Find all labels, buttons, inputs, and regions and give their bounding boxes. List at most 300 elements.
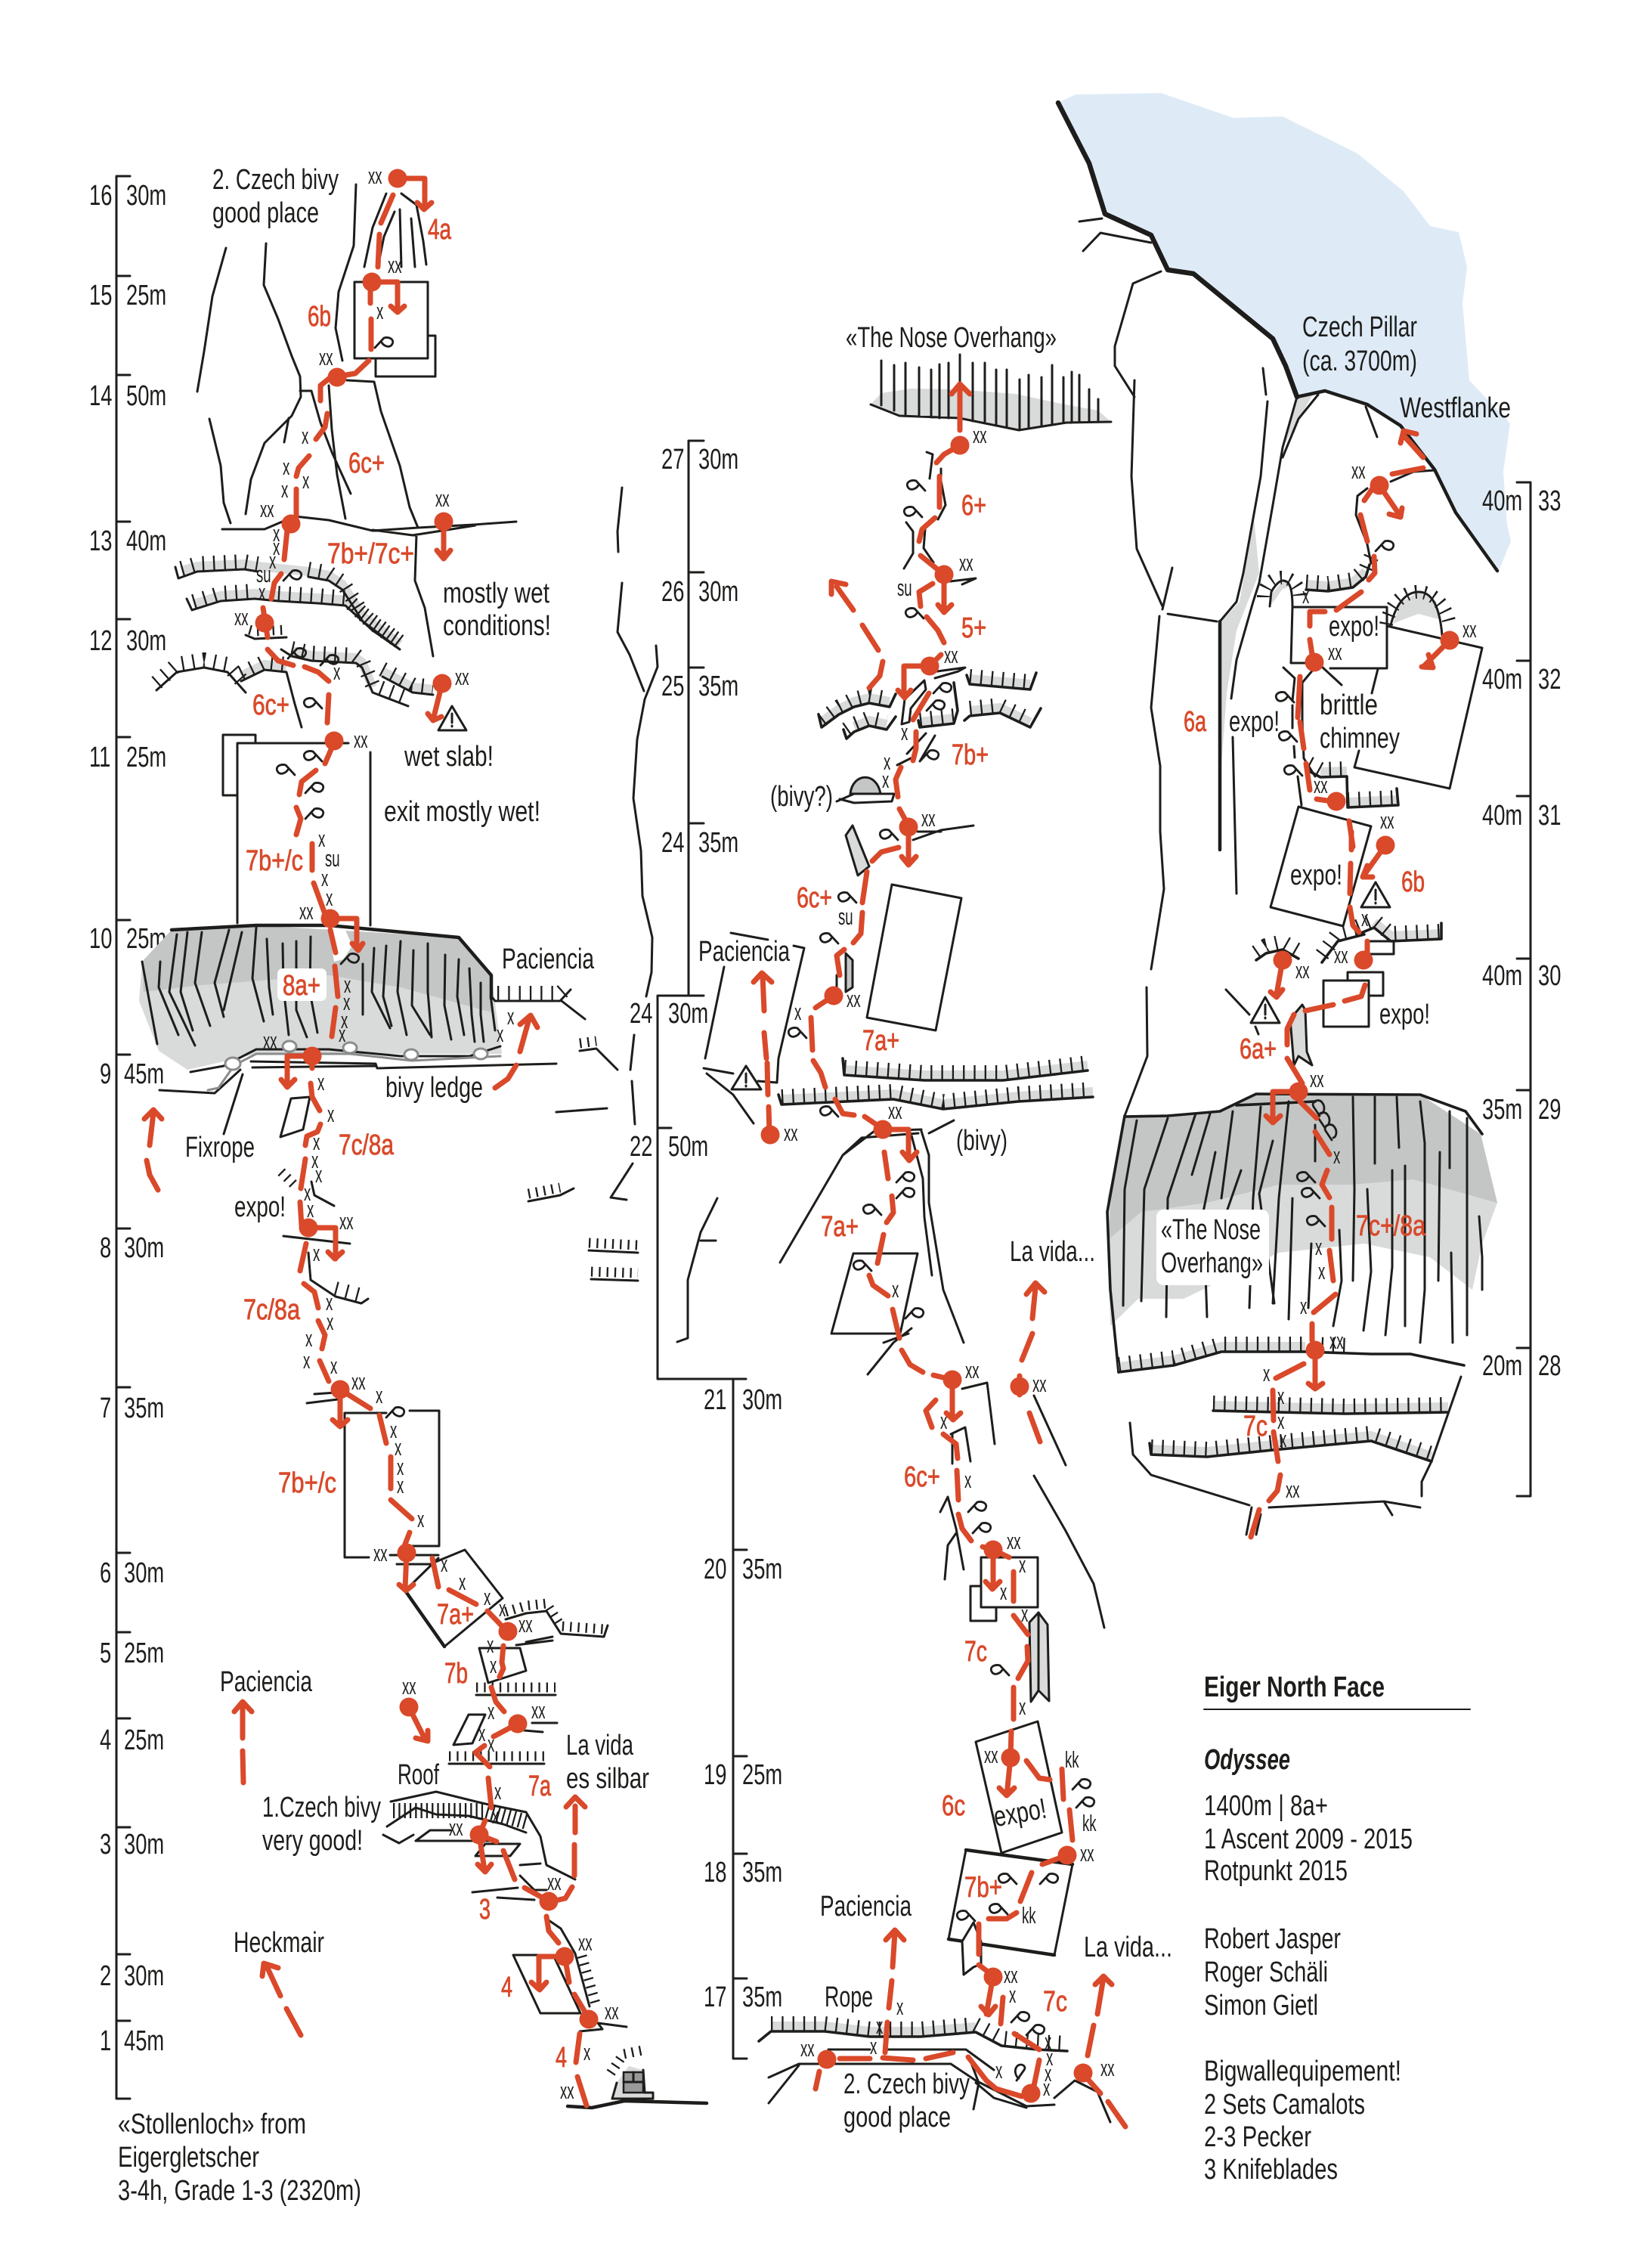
Czech Pillar ridge and outline [1058, 103, 1497, 1116]
bolt marks: xx [402, 1674, 416, 1699]
bolt marks: x [487, 1632, 494, 1658]
bolt marks middle: x [901, 720, 908, 745]
bolt marks: x [417, 1507, 424, 1532]
bolt marks: x [269, 548, 276, 574]
grades left: 6c+ [252, 689, 289, 721]
overhang at pitch 10 shaded rock [139, 925, 502, 1070]
approach note [118, 2108, 361, 2207]
pitch scale right: 31 [1538, 800, 1561, 832]
notes middle: La vida... [1084, 1932, 1172, 1963]
equipment list: 2 Sets Camalots [1204, 2089, 1365, 2121]
notes left: wet slab! [404, 741, 494, 773]
equipment list: Bigwallequipement! [1204, 2056, 1401, 2087]
notes middle: (bivy?) [770, 781, 833, 813]
first ascensionists: Simon Gietl [1204, 1990, 1318, 2022]
bolt marks: x [390, 1418, 397, 1443]
bolt marks middle: x [1009, 1982, 1016, 2008]
bolt marks middle: kk [1065, 1747, 1079, 1773]
bolt marks: x [305, 1326, 312, 1352]
pitch scale right: 28 [1538, 1350, 1561, 1382]
bolt marks middle: su [897, 575, 912, 601]
bolt marks: x [273, 521, 280, 547]
pitch scale left: 40m [126, 525, 166, 557]
grades middle: 5+ [961, 612, 986, 644]
bolt marks: xx [455, 665, 469, 690]
pitch scale middle upper [630, 441, 746, 1379]
pitch scale right: 40m [1482, 800, 1522, 832]
bolt marks right: xx [1295, 958, 1310, 984]
grades middle: 6c [942, 1790, 965, 1822]
hatching bands middle [759, 673, 1093, 2051]
pitch scale left: 30m [124, 1557, 164, 1589]
bolt marks middle: x [794, 999, 801, 1025]
bolt marks middle: xx [784, 1120, 798, 1146]
pitch scale left: 6 [100, 1557, 111, 1589]
grades middle: 6c+ [904, 1461, 940, 1493]
notes left: exit mostly wet! [384, 796, 540, 828]
grades right: 7c+/8a [1356, 1210, 1426, 1242]
notes middle: «The Nose Overhang» [846, 322, 1057, 354]
bolt marks: x [326, 885, 333, 911]
notes left: conditions! [443, 610, 551, 642]
red route right [1251, 431, 1450, 1537]
bivy boulder [850, 777, 881, 794]
pitch scale left: 30m [124, 1829, 164, 1861]
pitch scale right: 30 [1538, 960, 1561, 992]
approach note: Eigergletscher [118, 2142, 259, 2174]
pitch scale right: 32 [1538, 664, 1561, 696]
box sides with 7b+ pitch [949, 1850, 1072, 1955]
notes right [1161, 311, 1511, 1279]
pitch scale middle lower: 30m [742, 1384, 782, 1416]
notes middle: Rope [825, 1981, 873, 2013]
grades left: 7c/8a [243, 1294, 301, 1326]
pitons middle [788, 480, 1094, 2081]
bolt marks middle: kk [1082, 1811, 1097, 1836]
pitch scale right [1482, 482, 1561, 1496]
arrow: to Paciencia middle upper [754, 973, 772, 1135]
bolt marks: x [488, 1699, 494, 1724]
bolt marks: x [303, 1348, 310, 1374]
title: Eiger North Face [1204, 1672, 1385, 1703]
pitch scale left: 35m [124, 1393, 164, 1424]
grades middle: 7b+ [952, 739, 989, 771]
fixrope [208, 1054, 500, 1090]
overhang hatching bands left [156, 562, 642, 2073]
bolt marks middle: xx [1004, 1963, 1018, 1988]
grades middle: 7c [1043, 1986, 1067, 2018]
arrow: to Paciencia upper [495, 1015, 537, 1088]
arrow: to La vida lower middle [1083, 1976, 1125, 2127]
pitch scale left: 9 [100, 1058, 111, 1090]
pitch scale left: 3 [100, 1829, 111, 1861]
bolt marks right: x [1263, 1361, 1270, 1387]
bolt marks middle: x [896, 1994, 903, 2020]
notes middle [698, 322, 1172, 2133]
grey inside arches [1271, 581, 1441, 624]
pitch scale left: 12 [89, 625, 112, 657]
pitch scale right: 35m [1482, 1094, 1522, 1126]
notes left [185, 164, 649, 1959]
notes left: Paciencia [502, 943, 595, 975]
pitch scale left: 16 [89, 180, 112, 212]
grades right [1184, 706, 1426, 1442]
bolt marks middle: x [870, 2034, 877, 2059]
grades middle: 7a+ [821, 1211, 859, 1243]
equipment list: 2-3 Pecker [1204, 2121, 1311, 2153]
bolt marks: x [492, 1803, 499, 1829]
route data: Rotpunkt 2015 [1204, 1855, 1348, 1887]
bolt marks right: xx [1329, 1328, 1344, 1354]
pitch scale left: 15 [89, 280, 112, 311]
bolt marks right: xx [1310, 1067, 1324, 1092]
pitch scale left: 2 [100, 1960, 111, 1992]
bolt marks right: x [1280, 1427, 1286, 1452]
approach note: «Stollenloch» from [118, 2108, 306, 2140]
bolt marks: xx [260, 497, 274, 522]
bolt marks middle: x [1019, 1552, 1026, 1578]
notes middle: Paciencia [820, 1891, 912, 1923]
bolt marks middle: xx [965, 1358, 980, 1383]
notes right: (ca. 3700m) [1302, 345, 1417, 377]
bolt marks middle: xx [973, 423, 987, 448]
rock features middle [677, 452, 1110, 2122]
bolt marks: x [490, 1653, 497, 1678]
bolt marks middle: x [1021, 1601, 1028, 1627]
bolt marks: x [330, 1353, 337, 1379]
bolt marks middle: xx [921, 806, 936, 832]
grades left: 7b+/c [246, 845, 303, 877]
grades middle [797, 490, 1067, 2018]
bolt marks: x [307, 1197, 314, 1222]
pitch scale left: 45m [124, 1058, 164, 1090]
grades left [243, 214, 567, 2074]
grades left: 3 [479, 1894, 491, 1926]
panel: middle topo, pitches 17-27 [618, 322, 1172, 2133]
grades left: 7b [444, 1658, 468, 1690]
bolt marks: x [339, 1021, 345, 1047]
snowfield: west flank [1058, 93, 1511, 571]
grades middle: 6c+ [797, 882, 832, 914]
grades left: 6b [308, 301, 331, 333]
pitch scale left: 13 [89, 525, 112, 557]
bolt marks middle: x [1046, 2045, 1053, 2071]
grades left: 8a+ [283, 970, 320, 1002]
route data [1204, 1790, 1413, 1887]
bolt marks: x [327, 1101, 334, 1127]
bolt marks: x [376, 1383, 382, 1408]
pitch scale middle upper: 30m [698, 576, 738, 608]
protection icons: pitons [277, 337, 404, 1418]
long crack between columns [618, 488, 658, 996]
notes middle: La vida... [1010, 1236, 1095, 1268]
pitch scale left: 30m [126, 180, 166, 212]
pitch scale middle lower: 25m [742, 1759, 782, 1791]
bolt marks: x [484, 1585, 491, 1610]
grades right: 6b [1401, 866, 1425, 898]
pitch scale right: 20m [1482, 1350, 1522, 1382]
bolt marks middle: xx [944, 643, 958, 668]
pitch scale right: 29 [1538, 1094, 1561, 1126]
pitch scale left: 25m [126, 280, 166, 311]
notes right: Westflanke [1400, 392, 1511, 424]
pitch scale middle upper: 30m [698, 444, 738, 476]
bolt marks: xx [560, 2078, 574, 2104]
pitch scale left: 25m [126, 923, 166, 955]
grades left: 7a [528, 1771, 552, 1802]
bolt marks middle: xx [888, 1098, 902, 1124]
notes middle: 2. Czech bivy [843, 2068, 970, 2100]
pitch scale left: 14 [89, 380, 112, 412]
pitch scale middle upper: 22 [630, 1131, 652, 1163]
bolt marks: su [256, 562, 271, 587]
notes right: brittle [1320, 689, 1378, 721]
notes left: Paciencia [220, 1666, 313, 1698]
bolt marks: x [397, 1455, 404, 1480]
bolt marks: xx [547, 1870, 562, 1895]
grades left: 7c/8a [339, 1129, 395, 1161]
notes left: bivy ledge [385, 1072, 483, 1104]
notes middle: good place [843, 2102, 951, 2133]
pitch scale middle upper: 50m [668, 1131, 708, 1163]
pitch scale middle lower: 35m [742, 1981, 782, 2013]
grades left: 7b+/7c+ [327, 538, 414, 570]
Nose overhang rock [1107, 1094, 1497, 1372]
arrow: to Paciencia lower [234, 1702, 252, 1783]
bolt marks middle: xx [1032, 1371, 1047, 1397]
bolt marks right: xx [1334, 943, 1348, 968]
grades middle: 7a+ [862, 1025, 899, 1057]
bolt marks: x [478, 1721, 485, 1746]
hatching bands right [1119, 556, 1464, 1461]
grades left: 7a+ [437, 1599, 474, 1631]
bolt marks middle: x [876, 2013, 883, 2039]
bolt marks middle: x [1019, 1694, 1026, 1720]
bolt marks middle: xx [984, 1743, 998, 1768]
bolt marks middle: x [964, 1467, 971, 1493]
bolt marks right: xx [1286, 1477, 1300, 1503]
bolt marks: xx [373, 1541, 388, 1566]
bolt marks right: xx [1314, 773, 1328, 798]
flake block pitch 30 [1290, 1005, 1312, 1065]
pitch scale left: 10 [89, 923, 112, 955]
bolt marks middle: xx [800, 2036, 815, 2062]
pitch scale middle upper: 30m [668, 998, 708, 1030]
equipment list [1204, 2056, 1401, 2186]
rock features: cracks, ledges, boxes [159, 184, 635, 2031]
bolt marks right: x [1333, 1143, 1340, 1169]
bolt marks: x [313, 1129, 320, 1155]
bolt marks: x [302, 468, 309, 494]
bolt marks: xx [354, 727, 368, 753]
bolt marks: xx [263, 1028, 277, 1054]
bolt marks: x [333, 659, 340, 685]
bolt marks: x [281, 477, 288, 503]
flake blocks [837, 826, 1049, 1975]
pitch scale left [89, 176, 166, 2099]
notes right: expo! [1379, 999, 1430, 1030]
pitch scale right: 40m [1482, 664, 1522, 696]
notes left: Heckmair [234, 1927, 324, 1959]
pitch scale left: 1 [100, 2025, 111, 2057]
bolt marks [234, 163, 619, 2104]
bolt marks: x [327, 1309, 333, 1335]
warning triangle: wet slab [438, 706, 466, 730]
bolt marks: xx [578, 1930, 593, 1956]
notes right: chimney [1320, 723, 1400, 754]
bolt marks: x [499, 1596, 506, 1622]
grades left: 4a [428, 214, 452, 246]
pitch scale left: 25m [124, 1637, 164, 1669]
bolt marks right: xx [1328, 640, 1342, 665]
route data: 1400m | 8a+ [1204, 1790, 1328, 1822]
bolt marks: x [583, 2040, 590, 2065]
bolt marks: x [344, 972, 351, 998]
notes left: 1.Czech bivy [262, 1792, 381, 1823]
bolt marks right: x [1300, 1294, 1307, 1319]
warning triangles right [1251, 882, 1390, 1023]
pitch scale middle lower: 21 [704, 1384, 726, 1416]
bolt marks: xx [435, 486, 450, 512]
first ascensionists: Robert Jasper [1204, 1923, 1341, 1955]
pitch scale left: 45m [124, 2025, 164, 2057]
bolt marks: xx [351, 1369, 366, 1395]
notes left: 2. Czech bivy [212, 164, 339, 196]
bolt marks: xx [449, 1815, 463, 1841]
pitch scale middle upper: 35m [698, 671, 738, 702]
grades left: 6c+ [348, 448, 385, 479]
pitch scale right: 40m [1482, 485, 1522, 517]
pitch scale right: 40m [1482, 960, 1522, 992]
bolt marks middle: xx [1007, 1529, 1021, 1554]
pitch scale left: 4 [100, 1724, 111, 1756]
notes left: es silbar [566, 1763, 649, 1795]
pitch scale left: 50m [126, 380, 166, 412]
bolt marks: x [304, 1180, 311, 1206]
notes left: Roof [398, 1759, 439, 1791]
pitons right [1276, 541, 1394, 1226]
grades right: 6a [1184, 706, 1207, 738]
bolt marks right: x [1315, 1235, 1322, 1260]
bolt marks middle: x [1043, 2075, 1050, 2101]
notes right: «The Nose [1161, 1214, 1261, 1246]
notes right: expo! [1329, 611, 1379, 643]
bolt marks: x [326, 1290, 333, 1315]
grades right: 6a+ [1240, 1033, 1277, 1065]
bolt marks: x [315, 1162, 322, 1188]
bolt marks: xx [518, 1612, 533, 1637]
radial ticks on arches [1264, 578, 1450, 624]
pitch scale middle upper: 25 [661, 671, 684, 702]
bolt marks right: xx [1380, 808, 1394, 834]
first ascensionists: Roger Schäli [1204, 1957, 1328, 1988]
bolt marks middle: xx [847, 987, 861, 1012]
bolt marks: x [343, 990, 350, 1015]
bolt marks: x [341, 1008, 348, 1033]
bolt marks: x [321, 866, 328, 891]
pitch scale middle lower: 18 [704, 1857, 726, 1888]
arrow: to Paciencia lower middle [885, 1930, 904, 2053]
notes left: good place [212, 197, 319, 229]
pitch scale left: 7 [100, 1393, 111, 1424]
warning triangle middle [732, 1066, 761, 1089]
pitch scale middle upper: 26 [661, 576, 684, 608]
bolt marks middle: xx [1080, 1841, 1094, 1867]
pitch scale middle lower [704, 1379, 782, 2059]
bolt marks: xx [531, 1698, 546, 1724]
first ascensionists [1204, 1923, 1341, 2022]
bolt marks middle: x [940, 1408, 947, 1434]
bolt marks: x [497, 1021, 503, 1047]
grades middle: 6+ [961, 490, 986, 522]
pitch scale left: 30m [126, 625, 166, 657]
bolt marks: xx [605, 1999, 619, 2025]
notes left: Fixrope [185, 1132, 255, 1163]
equipment list: 3 Knifeblades [1204, 2154, 1338, 2186]
pitch scale left: 25m [126, 742, 166, 773]
bolt marks: x [376, 299, 383, 324]
route data: 1 Ascent 2009 - 2015 [1204, 1823, 1413, 1855]
grades middle: 7b+ [964, 1872, 1002, 1904]
notes middle: expo! [992, 1793, 1049, 1833]
pitch scale left: 5 [100, 1637, 111, 1669]
Nose overhang band from below [871, 355, 1111, 430]
bolt marks middle: x [892, 1277, 899, 1303]
info block: route facts [1204, 1672, 1470, 2186]
bolt marks middle: su [838, 904, 853, 930]
bolt marks: x [488, 1731, 494, 1757]
notes left: expo! [234, 1191, 286, 1223]
pitch scale left: 25m [124, 1724, 164, 1756]
pitch scale middle lower: 20 [704, 1554, 726, 1585]
pitch scale middle lower: 17 [704, 1981, 726, 2013]
notes right: expo! [1290, 860, 1342, 891]
pitch scale left: 8 [100, 1232, 111, 1264]
bolt marks: x [311, 1148, 318, 1173]
bolt marks: x [317, 1070, 324, 1095]
bolt marks: x [313, 1241, 320, 1266]
bolt marks: x [459, 1569, 466, 1595]
red route left [263, 178, 589, 2105]
panel: lower and upper left topo, pitches 1-16 [89, 163, 707, 2207]
pitch scale middle upper: 27 [661, 444, 684, 476]
pitch scale middle upper: 24 [630, 998, 652, 1030]
bolt marks: xx [368, 163, 382, 189]
bolt marks right: x [1302, 583, 1309, 609]
bolt marks: x [273, 534, 280, 560]
bolt marks right: x [1318, 1259, 1325, 1284]
hut at the Stollenloch [568, 2066, 707, 2108]
bolt marks middle [784, 423, 1115, 2101]
grades left: 4 [501, 1972, 512, 2003]
bolt marks middle: x [884, 749, 890, 775]
arrow: up-left branch near pitch 25 [831, 581, 883, 688]
bolt marks middle: x [1000, 1579, 1007, 1605]
arrow: to Heckmair [262, 1963, 301, 2035]
notes left: very good! [262, 1825, 363, 1857]
approach note: 3-4h, Grade 1-3 (2320m) [118, 2175, 361, 2207]
grades left: 7b+/c [278, 1467, 336, 1499]
pitch scale middle lower: 35m [742, 1554, 782, 1585]
bolt marks: su [325, 846, 340, 872]
bolt marks right: xx [1351, 458, 1366, 484]
bolt marks right: x [1277, 1408, 1284, 1434]
notes left: La vida [566, 1730, 634, 1761]
bolt marks right [1263, 458, 1477, 1503]
bolt marks: xx [234, 605, 249, 631]
bolt marks: x [441, 1551, 447, 1577]
pitch scale left: 30m [124, 1232, 164, 1264]
